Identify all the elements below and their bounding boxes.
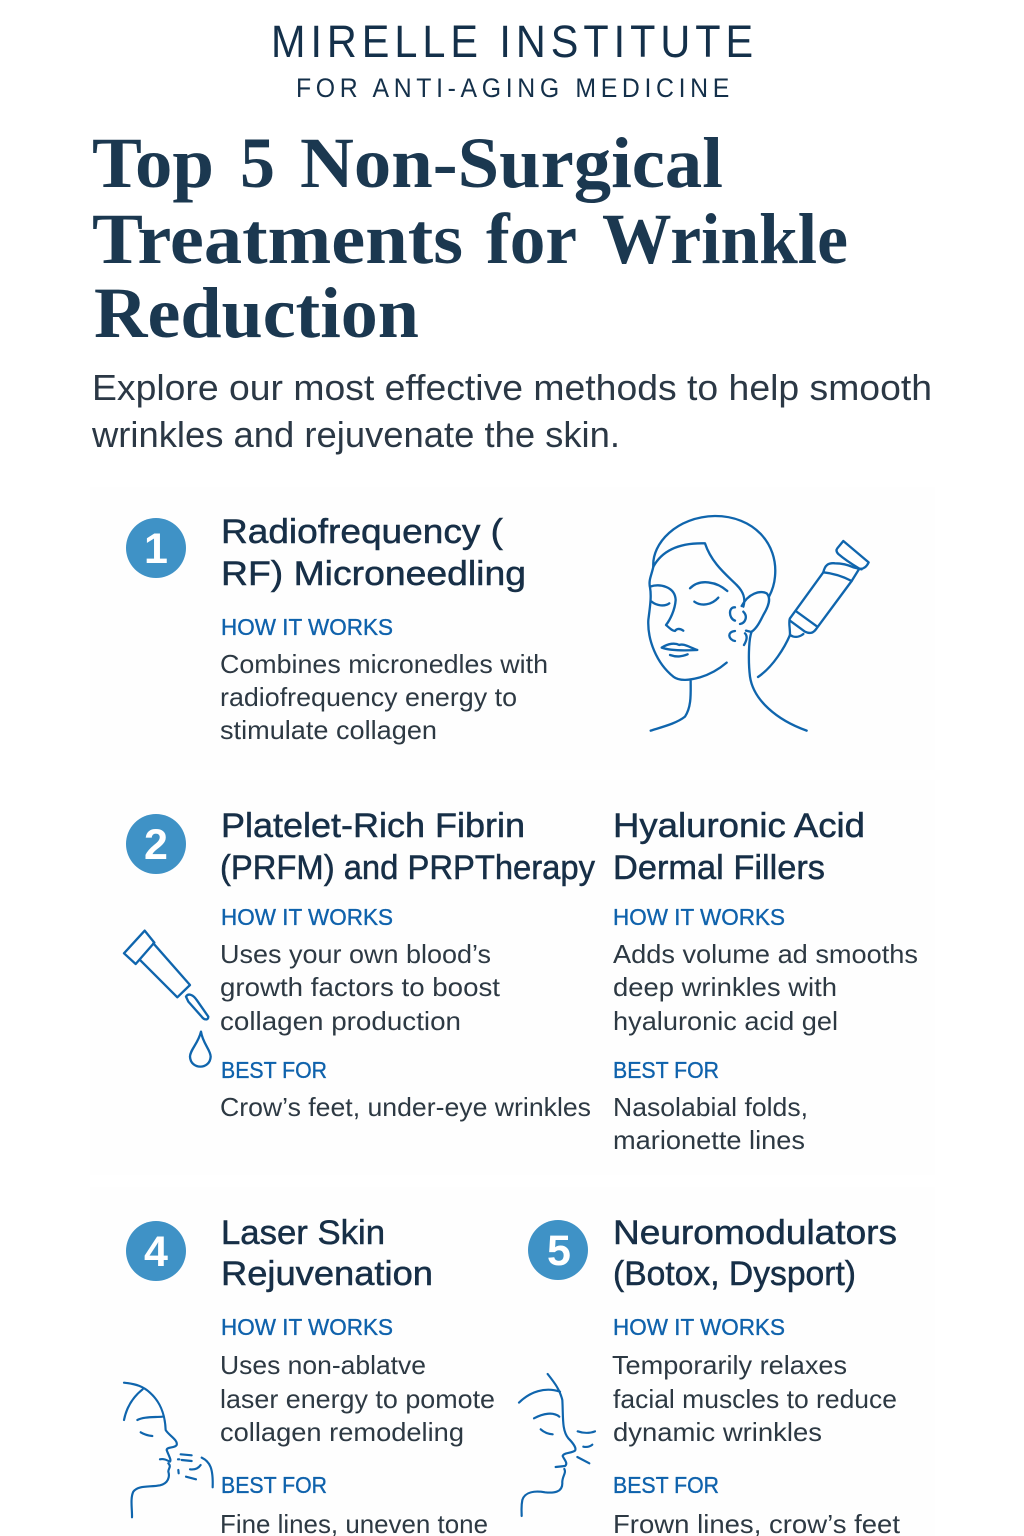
title: Wrinkle: [602, 199, 848, 279]
number badge 4: 4: [144, 1228, 168, 1276]
heading: platelet-rich fibrin: [220, 807, 595, 887]
title: for: [486, 199, 577, 279]
label: how it works: HOW IT WORKS: [613, 1314, 785, 1340]
description: [612, 1350, 897, 1447]
best for text: Nasolabial folds,: [613, 1092, 808, 1122]
label: best for: BEST FOR: [221, 1057, 327, 1083]
heading: platelet-rich fibrin: Platelet-Rich Fibrin: [221, 807, 525, 845]
description: [220, 1350, 495, 1447]
description: deep wrinkles with: [613, 972, 837, 1002]
description: Adds volume ad smooths: [613, 939, 918, 969]
label: how it works: HOW IT WORKS: [221, 904, 393, 930]
heading: neuromodulators: Neuromodulators: [613, 1214, 897, 1252]
number badge 2: 2: [144, 821, 168, 869]
heading: laser skin rejuvenation: Laser Skin: [221, 1214, 385, 1252]
description: hyaluronic acid gel: [613, 1006, 838, 1036]
number badge 1: 1: [144, 525, 168, 573]
panel: treatments 2 and 3: [90, 780, 935, 1175]
description: [220, 939, 501, 1036]
heading: hyaluronic acid: Hyaluronic Acid: [613, 807, 865, 845]
description: laser energy to pomote: [220, 1384, 495, 1414]
description: Uses your own blood’s: [220, 939, 491, 969]
heading: laser skin rejuvenation: [221, 1214, 433, 1293]
label: best for: BEST FOR: [221, 1472, 327, 1498]
description: radiofrequency energy to: [220, 682, 517, 712]
label: how it works: HOW IT WORKS: [221, 614, 393, 640]
subtitle: Explore our most effective methods to help smooth: [92, 367, 932, 408]
label: how it works: HOW IT WORKS: [613, 904, 785, 930]
heading: hyaluronic acid: Dermal Fillers: [613, 849, 825, 887]
icon: profile with laser: [124, 1383, 213, 1517]
heading: platelet-rich fibrin: (PRFM) and PRPTherapy: [220, 849, 595, 887]
description: stimulate collagen: [220, 715, 437, 745]
subtitle: wrinkles and rejuvenate the skin.: [91, 414, 620, 455]
description: growth factors to boost: [220, 972, 501, 1002]
icon: face with microneedling pen: [648, 516, 869, 731]
label: best for: BEST FOR: [613, 1472, 719, 1498]
label: best for: BEST FOR: [613, 1057, 719, 1083]
description: collagen production: [220, 1006, 461, 1036]
heading: neuromodulators: (Botox, Dysport): [613, 1255, 856, 1293]
header: institute name: FOR ANTI-AGING MEDICINE: [296, 74, 729, 103]
description: [220, 649, 548, 745]
description: dynamic wrinkles: [613, 1417, 822, 1447]
heading: radiofrequency microneedling: [221, 513, 526, 593]
description: collagen remodeling: [220, 1417, 464, 1447]
title: Treatments: [92, 199, 463, 279]
title: [92, 123, 848, 353]
heading: hyaluronic acid: [613, 807, 865, 887]
description: Uses non-ablatve: [220, 1350, 426, 1380]
best for text: marionette lines: [613, 1125, 805, 1155]
panel: treatment 1 radiofrequency microneedling: [90, 487, 935, 770]
best for text: Crow’s feet, under-eye wrinkles: [220, 1092, 591, 1122]
number badge 4: [126, 1221, 186, 1281]
number badge 1: [126, 518, 186, 578]
header: institute name: [271, 17, 753, 103]
description: Combines micronedles with: [220, 649, 548, 679]
number badge 2: [126, 814, 186, 874]
title: Non-Surgical: [300, 123, 723, 203]
icon: dropper with drop: [124, 931, 211, 1067]
heading: neuromodulators: [613, 1214, 897, 1293]
number badge 5: [528, 1220, 588, 1280]
icon: profile with muscle lines: [519, 1374, 595, 1516]
title: 5: [240, 123, 275, 203]
best for text: [613, 1092, 808, 1155]
panel: treatments 4 and 5: [90, 1187, 935, 1536]
title: Reduction: [94, 273, 419, 353]
heading: laser skin rejuvenation: Rejuvenation: [221, 1255, 433, 1293]
header: institute name: MIRELLE INSTITUTE: [271, 17, 753, 67]
label: how it works: HOW IT WORKS: [221, 1314, 393, 1340]
description: facial muscles to reduce: [613, 1384, 897, 1414]
heading: radiofrequency microneedling: Radiofrequency (: [221, 513, 504, 551]
subtitle: [91, 367, 932, 455]
description: Temporarily relaxes: [612, 1350, 847, 1380]
heading: radiofrequency microneedling: RF) Microneedling: [221, 555, 526, 593]
title: Top: [92, 123, 214, 203]
number badge 5: 5: [547, 1227, 571, 1275]
description: [613, 939, 918, 1036]
